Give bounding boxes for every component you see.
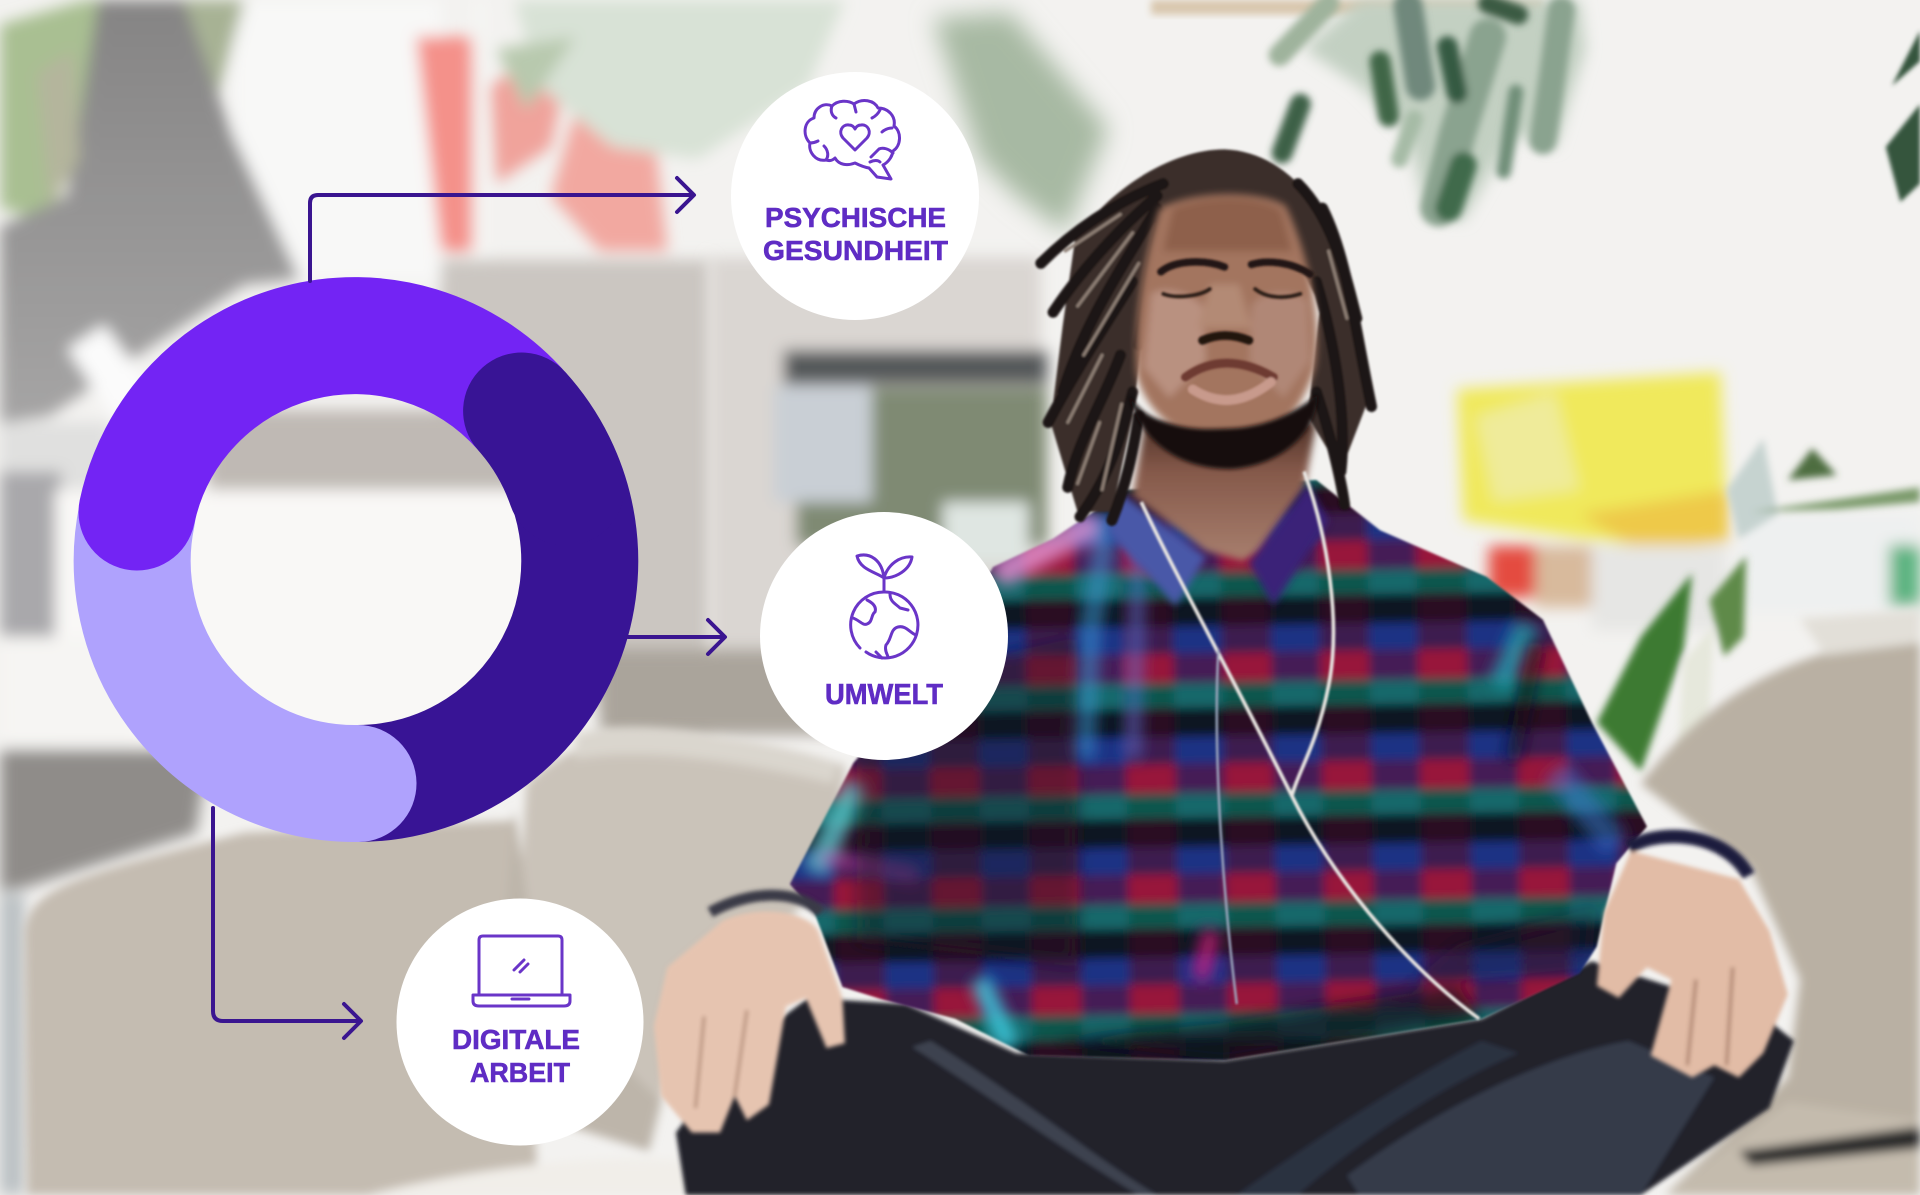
center shelf <box>600 12 1108 735</box>
arrow to Umwelt <box>628 620 725 654</box>
plaid fabric <box>784 465 1665 1078</box>
callout: Digitale Arbeit <box>396 898 644 1146</box>
face <box>1136 194 1317 444</box>
arrow to Digitale Arbeit <box>213 808 361 1038</box>
label line 2: GESUNDHEIT <box>763 235 948 266</box>
sofa <box>24 610 1920 1195</box>
callout: Psychische Gesundheit <box>731 72 979 320</box>
hanging leaves <box>1280 4 1561 208</box>
shirt <box>784 465 1665 1078</box>
donut chart ring <box>132 336 580 784</box>
label: DIGITALE <box>452 1024 580 1055</box>
icon: globe with sprout <box>851 555 918 658</box>
arrow to Psychische Gesundheit <box>310 178 694 281</box>
left hand <box>654 895 845 1133</box>
label line 2: ARBEIT <box>470 1057 570 1088</box>
blurred plant <box>933 12 1108 233</box>
trousers <box>676 961 1794 1195</box>
label: PSYCHISCHE <box>765 202 946 233</box>
yellow object and right plants <box>1457 372 1920 631</box>
far right leaves <box>1886 31 1920 202</box>
dreadlocks <box>1041 184 1371 520</box>
top right plants and shelf <box>1151 0 1920 220</box>
ring segment: light lavender <box>132 515 358 784</box>
shelf edge <box>1151 0 1543 15</box>
beard <box>1129 394 1318 469</box>
ring segment: bright violet <box>137 336 522 512</box>
icon: brain with heart <box>805 101 900 179</box>
ring segment: dark indigo <box>356 411 580 784</box>
callout: Umwelt <box>760 512 1008 760</box>
right hand <box>1597 836 1788 1078</box>
left washed out room <box>0 0 845 1195</box>
hair <box>1041 149 1371 520</box>
ring segment: dark cap <box>522 411 566 487</box>
neck <box>1133 422 1316 561</box>
collar <box>1108 484 1329 606</box>
foliage mass <box>1304 0 1586 220</box>
icon: laptop <box>473 936 570 1006</box>
label: UMWELT <box>825 679 943 711</box>
earphone cables <box>1141 471 1479 1019</box>
facial features <box>1161 262 1310 400</box>
